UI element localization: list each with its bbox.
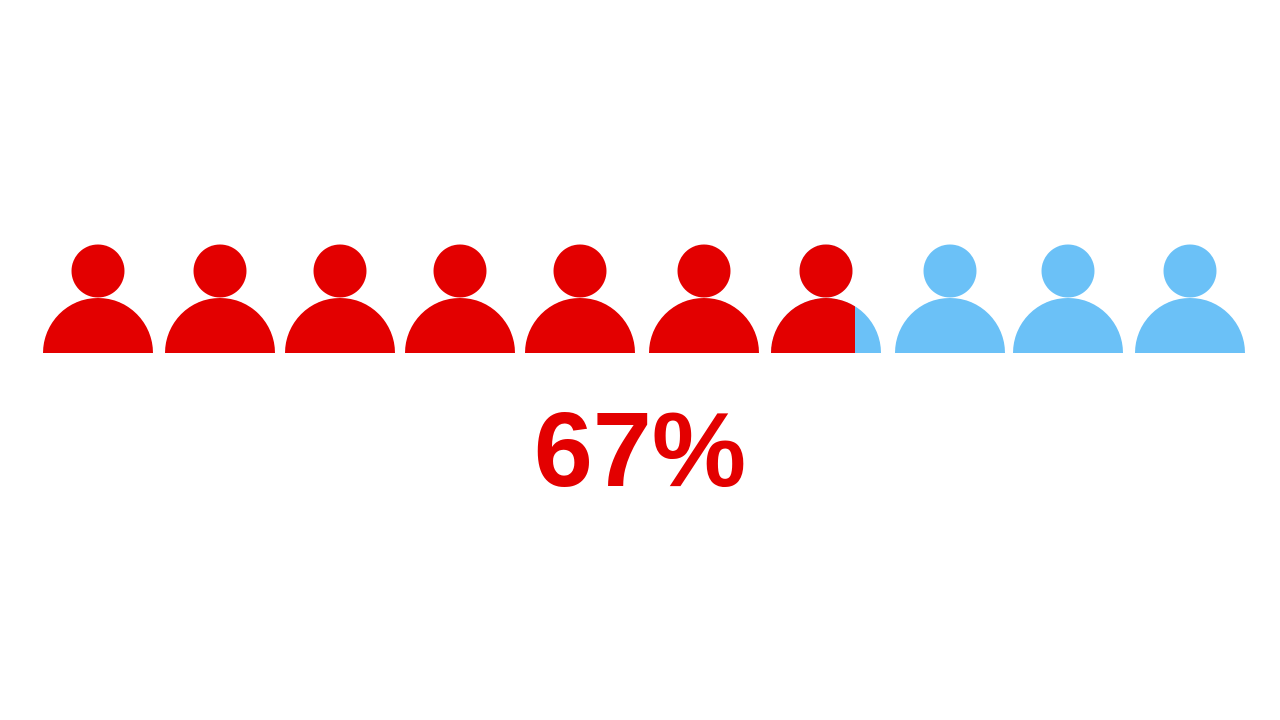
icon row: people	[43, 244, 1245, 353]
icon: person 10 blue	[1135, 244, 1245, 353]
icon: person 5 red	[525, 244, 635, 353]
icon: person 2 red	[165, 244, 275, 353]
icon: person 3 red	[285, 244, 395, 353]
icon: person 8 blue	[895, 244, 1005, 353]
icon: person 9 blue	[1013, 244, 1123, 353]
percentage label: 67%	[534, 391, 746, 509]
icon: person 7 partial	[771, 244, 881, 353]
icon: person 4 red	[405, 244, 515, 353]
infographic	[43, 244, 1245, 487]
icon: person 6 red	[649, 244, 759, 353]
icon: person 1 red	[43, 244, 153, 353]
